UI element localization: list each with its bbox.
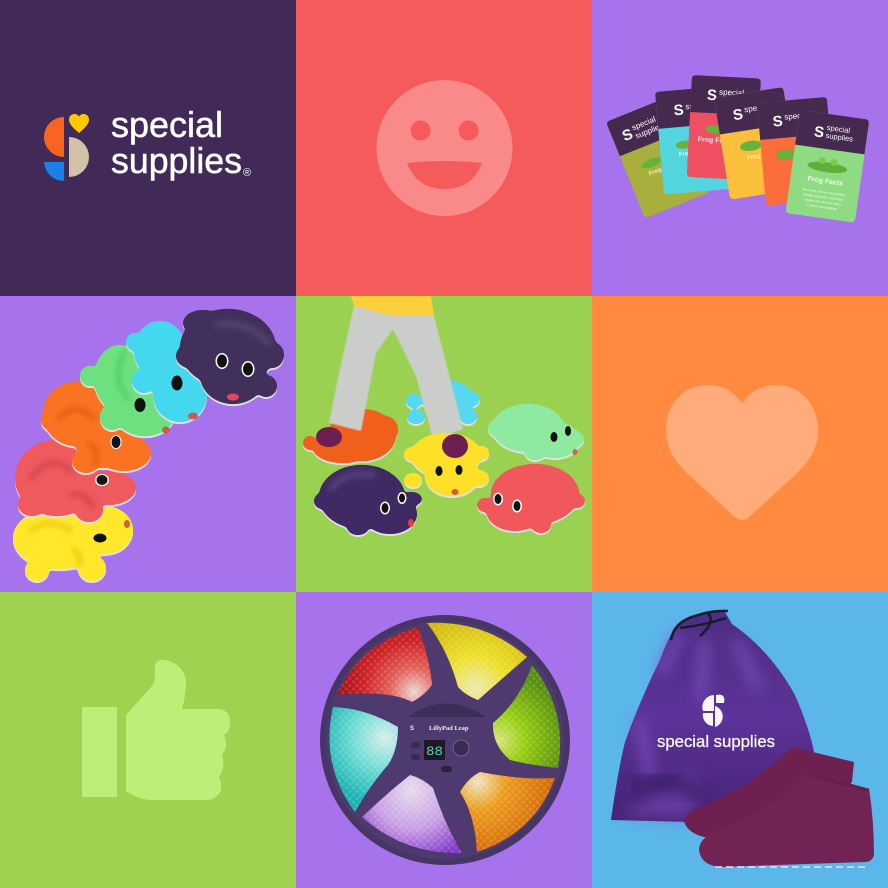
card: orange: special bbox=[784, 110, 810, 122]
disc: red pad bbox=[337, 627, 432, 702]
card: orange bbox=[757, 97, 836, 206]
drawstring bag bbox=[611, 611, 814, 822]
panel: brand logo bbox=[0, 0, 296, 296]
disc: digital display bbox=[424, 740, 445, 760]
panel: frog fact cards bbox=[592, 0, 888, 296]
icon: heart bbox=[666, 385, 818, 520]
card: green front: oxygen directly from water bbox=[804, 197, 842, 207]
disc: purple pad bbox=[362, 775, 462, 853]
card: green front: supplies bbox=[825, 131, 854, 144]
brand wordmark: ® bbox=[243, 167, 251, 179]
disc: yellow pad bbox=[427, 623, 527, 700]
frog: dark purple bbox=[176, 309, 284, 404]
brand wordmark bbox=[111, 104, 251, 181]
disc: orange pad bbox=[460, 772, 555, 852]
frog: orange bbox=[303, 409, 398, 463]
disc: product label: S bbox=[410, 726, 414, 732]
drawstring bbox=[671, 611, 728, 640]
frog: yellow bbox=[404, 433, 489, 496]
card: orange: S bbox=[772, 113, 783, 131]
disc: cyan pad bbox=[329, 707, 398, 812]
card: green front: special bbox=[826, 123, 851, 135]
frog: cyan bbox=[126, 321, 207, 422]
frog: cyan back bbox=[406, 380, 480, 424]
card: green front: S bbox=[813, 123, 825, 141]
icon: special supplies logo mark bbox=[44, 114, 89, 181]
card: yellow: special bbox=[744, 102, 770, 114]
socks bbox=[316, 427, 468, 458]
card: olive: supplies bbox=[634, 121, 664, 141]
card: olive: Frog bbox=[648, 167, 663, 177]
card: coral bbox=[687, 75, 761, 180]
panel: thumbs up bbox=[0, 592, 296, 888]
card: olive: S bbox=[620, 126, 635, 145]
bag brand text: special supplies bbox=[657, 732, 775, 751]
card: yellow: S bbox=[732, 106, 744, 124]
frog: red bbox=[477, 464, 585, 533]
disc body bbox=[320, 615, 570, 865]
card: green front: Frog Facts bbox=[807, 176, 844, 188]
brand wordmark: special bbox=[111, 104, 223, 145]
frog: dark purple bbox=[314, 465, 422, 535]
bag logo mark bbox=[702, 695, 724, 727]
disc: dial and buttons bbox=[411, 740, 469, 772]
disc: digital display: 88 bbox=[426, 744, 443, 759]
child's legs and shirt bbox=[329, 296, 463, 439]
card: coral: Frog Facts bbox=[698, 136, 734, 145]
panel: bag and socks bbox=[592, 592, 888, 888]
disc: product label bbox=[410, 725, 469, 732]
card: cyan: S bbox=[673, 102, 684, 119]
card: cyan: Frog bbox=[679, 151, 693, 158]
card: coral: S bbox=[707, 87, 717, 104]
card: yellow: Frog bbox=[747, 153, 761, 162]
disc: green pad bbox=[493, 665, 560, 768]
card: green front: Many frog species can breathe bbox=[802, 187, 846, 197]
card: green front: or moist surroundings. bbox=[806, 203, 838, 211]
frog: orange bbox=[41, 382, 151, 473]
card: yellow bbox=[714, 87, 799, 200]
disc: product label: LillyPad Leap bbox=[429, 725, 469, 732]
disc: speaker grille bbox=[408, 704, 486, 717]
card: cyan bbox=[655, 86, 733, 195]
icon: thumbs up bbox=[82, 660, 230, 800]
card: green front: through their skin, absorbing bbox=[803, 192, 844, 202]
panel: smiley face bbox=[296, 0, 592, 296]
card: olive: special bbox=[631, 115, 657, 132]
card: olive bbox=[606, 96, 710, 218]
icon: card frog bbox=[807, 155, 848, 175]
icon: smiley bbox=[376, 80, 512, 216]
frog: green bbox=[488, 404, 584, 460]
card: cyan: special bbox=[685, 100, 711, 111]
brand wordmark: supplies bbox=[111, 140, 242, 181]
frog: red bbox=[15, 440, 136, 522]
frog: yellow bbox=[13, 506, 133, 581]
panel: LillyPad Leap electronic disc bbox=[296, 592, 592, 888]
panel: child stepping on frogs bbox=[296, 296, 592, 592]
card: coral: special bbox=[719, 87, 744, 98]
card: green front bbox=[786, 110, 869, 223]
frog: green bbox=[80, 345, 175, 436]
panel: heart bbox=[592, 296, 888, 592]
panel: stacked frogs bbox=[0, 296, 296, 592]
sock: front bbox=[699, 772, 874, 867]
sock: back bbox=[684, 747, 854, 839]
